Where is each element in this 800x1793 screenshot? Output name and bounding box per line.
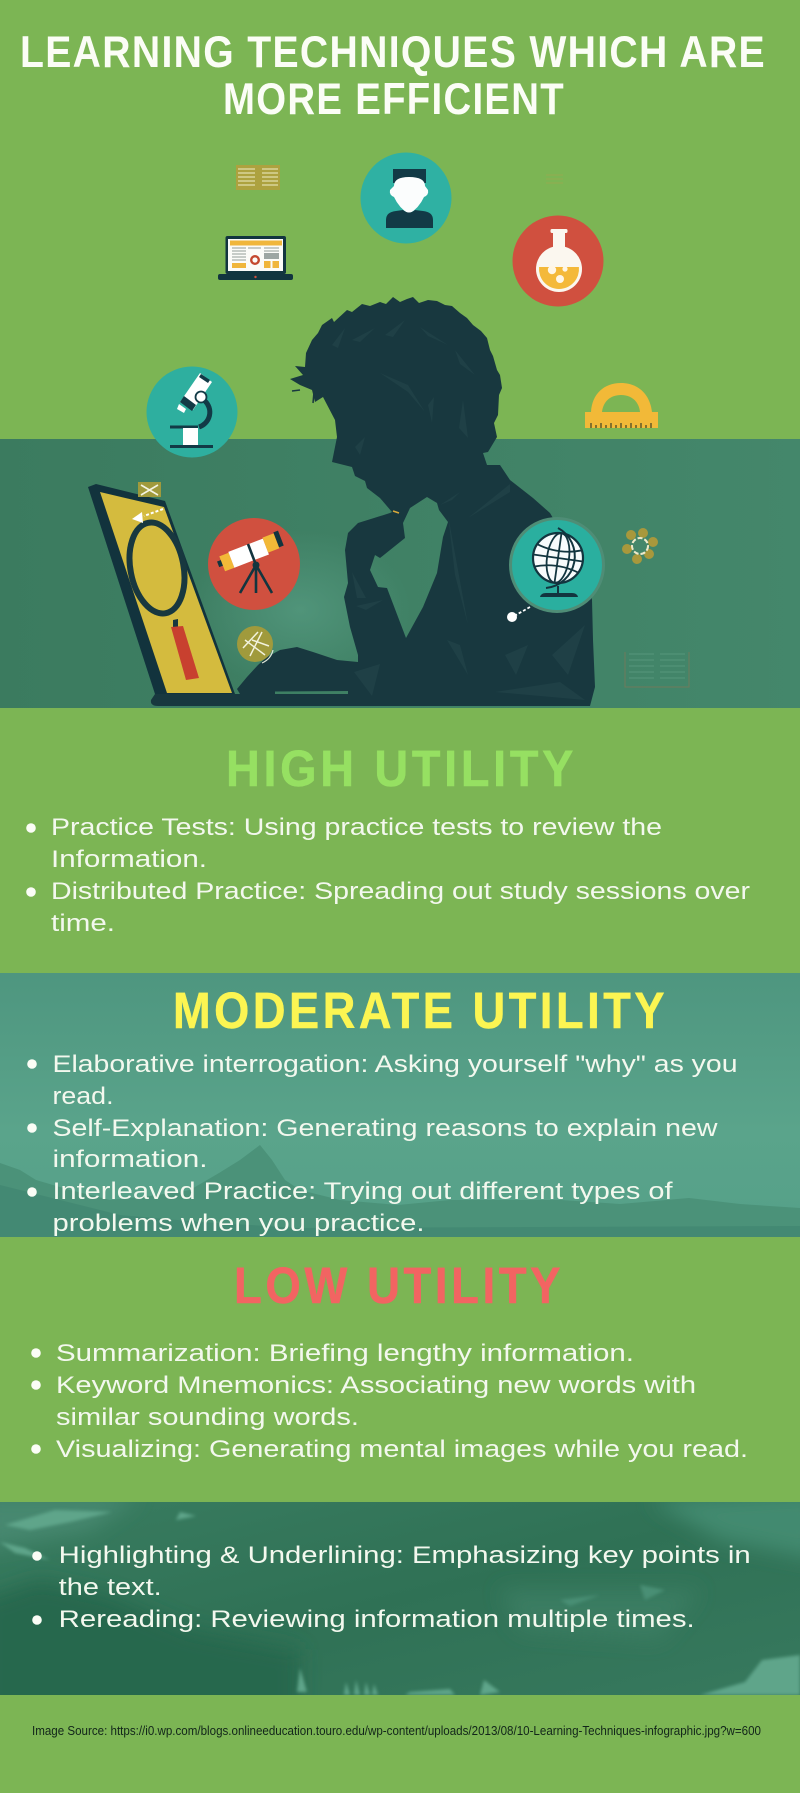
icon: faint open book [625, 652, 689, 687]
hair and clothing highlights [332, 320, 585, 700]
bullet list: moderate utility: information. [52, 1146, 208, 1173]
arrow to magnifier [132, 509, 163, 523]
mountains [0, 1145, 800, 1237]
bullet list: low utility: Keyword Mnemonics: Associating new words with [56, 1372, 696, 1399]
bullet list: high utility: Practice Tests: Using practice tests to review the [51, 814, 662, 841]
icon: telescope circle [208, 518, 300, 610]
dark band background [0, 439, 800, 708]
bullet list: high utility: Information. [51, 846, 207, 873]
bullet list: low utility: Summarization: Briefing lengthy information. [56, 1340, 634, 1367]
bullet list: low utility: similar sounding words. [56, 1404, 359, 1431]
heading: moderate utility: MODERATE UTILITY [173, 982, 668, 1039]
heading: low utility: LOW UTILITY [234, 1257, 564, 1314]
image source footer: Image Source: https://i0.wp.com/blogs.onlineeducation.touro.edu/wp-content/uploads/2013/08/10-Learning-Techniques-infographic.jpg?w=600 [32, 1724, 761, 1738]
bullet list: moderate utility [27, 1051, 737, 1237]
icon: faint note [546, 175, 563, 183]
bullet list: moderate utility: Elaborative interrogation: Asking yourself "why" as you [52, 1051, 738, 1078]
bullet list: forest panel: Highlighting & Underlining: Emphasizing key points in [59, 1542, 751, 1569]
silhouette of student at laptop [151, 297, 595, 706]
icon: envelope [138, 482, 161, 497]
forest texture [0, 1490, 800, 1720]
panel: high utility [26, 740, 750, 937]
bullet list: moderate utility: problems when you practice. [52, 1210, 424, 1237]
icon: open book small [236, 165, 280, 190]
chin accent [393, 511, 399, 513]
title [20, 28, 766, 124]
bullet list: high utility: time. [51, 910, 115, 937]
icon: flask circle [512, 216, 604, 306]
icon: protractor [585, 383, 658, 428]
bullet list: forest panel [32, 1542, 751, 1633]
bullet list: forest panel: Rereading: Reviewing information multiple times. [59, 1606, 695, 1633]
panel: moderate utility [0, 973, 800, 1237]
bullet list: moderate utility: Interleaved Practice: Trying out different types of [52, 1178, 673, 1205]
bullet list: low utility [31, 1340, 748, 1463]
heading: high utility: HIGH UTILITY [226, 740, 577, 797]
bullet list: forest panel: the text. [59, 1574, 162, 1601]
panel: forest low utility continued [0, 1502, 800, 1695]
icon: student circle [360, 152, 452, 244]
bullet list: high utility: Distributed Practice: Spreading out study sessions over [51, 878, 750, 905]
icon: globe circle [507, 518, 604, 622]
icon: microscope circle [146, 366, 238, 458]
icon: ball [237, 626, 273, 663]
bullet list: moderate utility: read. [52, 1083, 114, 1110]
laptop screen with magnifier [88, 482, 235, 694]
panel: low utility [0, 1237, 800, 1502]
icon: flower gear [622, 528, 658, 564]
globe pointer [507, 607, 530, 622]
title: MORE EFFICIENT [223, 75, 565, 124]
bullet list: moderate utility: Self-Explanation: Generating reasons to explain new [52, 1115, 718, 1142]
bullet list: low utility: Visualizing: Generating mental images while you read. [56, 1436, 748, 1463]
bullet list: high utility [26, 814, 750, 937]
icon: laptop small [218, 236, 293, 280]
hero illustration panel [0, 152, 800, 708]
